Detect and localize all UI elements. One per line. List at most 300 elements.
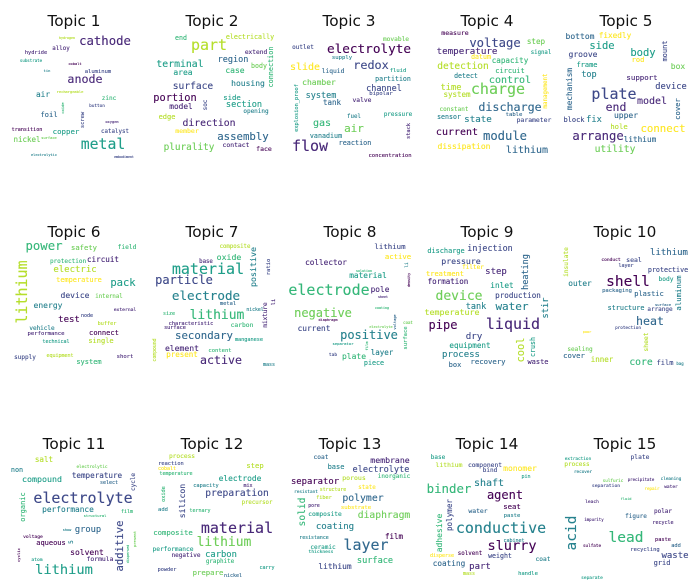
word cloud: topic 13: membrane xyxy=(370,455,410,465)
word cloud: topic 4: sensor xyxy=(437,113,461,121)
word cloud: topic 12: step xyxy=(246,461,264,470)
word cloud: topic 14: shaft xyxy=(474,478,504,489)
word cloud: topic 10: body xyxy=(659,276,674,283)
panel: topic 7 xyxy=(152,223,277,368)
word cloud: topic 4: lithium xyxy=(506,145,548,156)
word cloud: topic 9: treatment xyxy=(426,270,464,278)
word cloud: topic 13: lithium xyxy=(318,562,352,571)
word cloud: topic 14: agent xyxy=(487,488,523,502)
word cloud: topic 15: repair xyxy=(644,486,660,491)
word cloud: topic 2: region xyxy=(218,55,248,65)
word cloud: topic 13: diaphragm xyxy=(358,510,410,521)
word cloud: topic 11: show xyxy=(63,528,72,532)
word cloud: topic 2: extend xyxy=(245,49,267,56)
word cloud: topic 7: nickel xyxy=(246,307,264,313)
word cloud: topic 4: datum xyxy=(471,53,491,61)
word cloud: topic 3: bipolar xyxy=(369,91,393,97)
word cloud: topic 13: polymer xyxy=(342,493,384,504)
word cloud: topic 13: composite xyxy=(308,511,342,518)
word cloud: topic 5: end xyxy=(606,100,626,114)
word cloud: topic 14: adhesive xyxy=(435,514,444,552)
word cloud: topic 2: member xyxy=(175,127,199,135)
word cloud: topic 9: recovery xyxy=(470,357,506,366)
word cloud: topic 5: model xyxy=(637,96,667,107)
word cloud: topic 2: direction xyxy=(182,118,236,129)
word cloud: topic 7: element xyxy=(165,343,199,353)
word cloud: topic 6: short xyxy=(117,354,133,360)
word cloud: topic 4: table xyxy=(506,112,523,118)
word cloud: topic 4: step xyxy=(527,37,546,46)
word cloud: topic 4: management xyxy=(543,74,549,108)
word cloud: topic 11 xyxy=(11,455,137,578)
word cloud: topic 2: contact xyxy=(223,141,250,149)
word cloud: topic 2: end xyxy=(175,34,187,42)
word cloud: topic 6: test xyxy=(58,315,80,325)
word cloud: topic 3: concentration xyxy=(368,153,412,159)
word cloud: topic 2: edge xyxy=(159,113,175,121)
word cloud: topic 12: temperature xyxy=(159,471,193,477)
word cloud: topic 4: time xyxy=(441,83,461,93)
word cloud: topic 6: system xyxy=(76,358,102,366)
word cloud: topic 3: slide xyxy=(290,62,320,73)
word cloud: topic 14: pin xyxy=(521,474,531,480)
word cloud: topic 10: lithium xyxy=(650,248,688,258)
word cloud: topic 5: bottom xyxy=(566,32,595,41)
word cloud: topic 10: shell xyxy=(606,274,650,290)
word cloud: topic 11: electrolyte xyxy=(33,489,133,507)
word cloud: topic 3: tank xyxy=(323,98,342,107)
word cloud: topic 8: tab xyxy=(329,352,337,358)
word cloud: topic 1: metal xyxy=(81,136,125,153)
word cloud: topic 3: explosion_proof xyxy=(294,84,300,132)
panel: topic 13 xyxy=(291,435,411,571)
word cloud: topic 9: liquid xyxy=(486,315,540,333)
word cloud: topic 1: aluminum xyxy=(85,69,112,75)
word cloud: topic 1: screw xyxy=(80,111,86,128)
word cloud: topic 1: cathode xyxy=(79,34,131,48)
word cloud: topic 4: discharge xyxy=(478,100,542,114)
word cloud: topic 15: acid xyxy=(564,516,580,550)
word cloud: topic 11: structural xyxy=(84,513,106,518)
word cloud: topic 9: discharge xyxy=(427,247,465,255)
word cloud: topic 5: fix xyxy=(586,115,602,125)
word cloud: topic 5: mount xyxy=(661,40,669,62)
word cloud: topic 15: figure xyxy=(625,513,647,520)
word cloud: topic 3: air xyxy=(344,122,364,135)
word cloud: topic 4: voltage xyxy=(469,36,521,50)
word cloud: topic 9 xyxy=(425,243,551,369)
word cloud: topic 15: cleaning xyxy=(661,476,682,482)
word cloud: topic 4: charge xyxy=(471,80,525,98)
word cloud: topic 10 xyxy=(563,247,688,368)
word cloud: topic 1: substrate xyxy=(20,58,43,63)
word cloud: topic 2: portion xyxy=(153,92,197,104)
word cloud: topic 3: reaction xyxy=(339,139,371,147)
word cloud: topic 2: electrically xyxy=(226,33,274,41)
word cloud: topic 14: coat xyxy=(536,556,551,563)
word cloud: topic 9: stir xyxy=(541,298,551,318)
word cloud: topic 10: protection xyxy=(615,325,641,331)
title: topic 12: Topic 12 xyxy=(180,435,243,453)
word cloud: topic 11: film xyxy=(121,509,133,515)
word cloud: topic 14: handle xyxy=(518,571,538,577)
title: topic 10: Topic 10 xyxy=(593,223,656,241)
word cloud: topic 3: system xyxy=(306,91,336,101)
word cloud: topic 8: surface xyxy=(403,326,409,350)
word cloud: topic 12: preparation xyxy=(205,488,269,499)
word cloud: topic 3: outlet xyxy=(292,44,314,51)
word cloud: topic 15: fluid xyxy=(621,497,631,501)
word cloud: topic 1: embodiment xyxy=(114,155,134,159)
word cloud: topic 10: arrange xyxy=(647,306,673,313)
panel: topic 4 xyxy=(436,12,551,156)
word cloud: topic 10: outer xyxy=(568,279,592,288)
word cloud: topic 12: oxide xyxy=(161,486,167,502)
word cloud: topic 3: channel xyxy=(366,84,402,94)
word cloud: topic 6: external xyxy=(114,307,136,313)
word cloud: topic 1: tin xyxy=(44,69,50,73)
title: topic 2: Topic 2 xyxy=(184,12,239,30)
word cloud: topic 15: grid xyxy=(654,559,670,567)
word cloud: topic 14: mass xyxy=(463,571,475,577)
word cloud: topic 5: box xyxy=(671,62,685,71)
word cloud: topic 14: water xyxy=(468,507,488,515)
word cloud: topic 9: inlet xyxy=(490,281,514,290)
word cloud: topic 12 xyxy=(153,453,275,579)
word cloud: topic 13: solid xyxy=(297,498,308,526)
word cloud: topic 15 xyxy=(564,454,689,581)
word cloud: topic 10: plastic xyxy=(634,290,664,298)
word cloud: topic 10: aluminum xyxy=(674,275,683,311)
panel: topic 8 xyxy=(288,223,413,367)
word cloud: topic 11: organic xyxy=(19,492,27,522)
word cloud: topic 3: pressure xyxy=(384,112,413,118)
word cloud: topic 5: rod xyxy=(632,56,644,64)
word cloud: topic 6: power xyxy=(25,239,63,253)
word cloud: topic 1: nickel xyxy=(13,135,41,144)
panel: topic 12 xyxy=(153,435,275,579)
word cloud: topic 15: recover xyxy=(574,470,592,475)
word cloud: topic 6: lithium xyxy=(13,260,31,324)
word cloud: topic 12: process xyxy=(169,453,195,460)
word cloud: topic 14: component xyxy=(468,462,502,469)
word cloud: topic 3: stack xyxy=(406,122,412,139)
word cloud: topic 10: insulate xyxy=(563,247,570,277)
word cloud: topic 5: device xyxy=(655,82,687,92)
panel: topic 5 xyxy=(563,12,687,155)
word cloud: topic 7: content xyxy=(208,348,232,354)
word cloud: topic 1: copper xyxy=(53,127,80,136)
word cloud: topic 8: plate xyxy=(342,352,366,361)
word cloud: topic 8: diaphragm xyxy=(319,318,337,322)
word cloud: topic 12: prepare xyxy=(193,568,223,577)
word cloud: topic 1: alloy xyxy=(52,46,70,52)
word cloud: topic 7: material xyxy=(172,260,244,278)
word cloud: topic 1 xyxy=(12,34,134,159)
word cloud: topic 7: positive xyxy=(248,247,258,287)
word cloud: topic 8: piece xyxy=(364,359,384,367)
word cloud: topic 4: constant xyxy=(440,106,469,113)
word cloud: topic 4: system xyxy=(443,90,471,99)
word cloud: topic 15: precipitate xyxy=(628,477,655,482)
word cloud: topic 9: filter xyxy=(462,264,484,271)
title: topic 8: Topic 8 xyxy=(322,223,377,241)
word cloud: topic 5: block xyxy=(563,116,585,124)
word cloud: topic 14 xyxy=(427,454,551,577)
word cloud: topic 12: performance xyxy=(153,546,194,553)
word cloud: topic 11: aqueous xyxy=(36,539,66,547)
word cloud: topic 10: bag xyxy=(676,361,684,366)
word cloud: topic 9: injection xyxy=(467,243,513,253)
word cloud: topic 5: groove xyxy=(569,50,598,59)
word cloud: topic 11: compound xyxy=(22,474,62,484)
word cloud: topic 8: solution xyxy=(356,269,372,273)
word cloud: topic 14: monomer xyxy=(503,464,537,473)
word cloud: topic 15: separation xyxy=(592,483,620,489)
word cloud: topic 7: characteristic xyxy=(169,321,213,327)
word cloud: topic 8: pole xyxy=(371,285,390,294)
word cloud: topic 2: body xyxy=(251,62,267,70)
word cloud: topic 14: conductive xyxy=(456,519,546,537)
word cloud: topic 6: pack xyxy=(110,277,136,289)
word cloud: topic 3 xyxy=(290,36,413,159)
word cloud: topic 9: waste xyxy=(527,358,549,366)
word cloud: topic 1: oxygen xyxy=(105,120,119,124)
word cloud: topic 1: foil xyxy=(40,110,58,119)
word cloud: topic 14: weight xyxy=(488,552,512,560)
word cloud: topic 2: case xyxy=(225,66,245,75)
word cloud: topic 9: production xyxy=(495,291,541,300)
word cloud: topic 4: circuit xyxy=(495,67,525,75)
word cloud: topic 10: surface xyxy=(655,302,672,307)
word cloud: topic 13: porous xyxy=(342,474,366,482)
word cloud: topic 8: current xyxy=(298,324,330,333)
word cloud: topic 15: sulfate xyxy=(583,543,601,549)
word cloud: topic 5 xyxy=(563,31,687,155)
word cloud: topic 10: inner xyxy=(591,355,614,364)
word cloud: topic 6: performance xyxy=(27,331,65,337)
word cloud: topic 13: pore xyxy=(308,504,320,509)
panel: topic 14 xyxy=(427,435,551,577)
word cloud: topic 12: silicon xyxy=(177,484,187,518)
word cloud: topic 11: cycle xyxy=(130,473,137,491)
word cloud: topic 9: dry xyxy=(466,331,483,342)
word cloud: topic 3: supply xyxy=(332,55,353,61)
panel: topic 15 xyxy=(564,435,689,581)
word cloud: topic 12: graphite xyxy=(206,559,235,565)
word cloud: topic 2: area xyxy=(173,68,193,77)
word cloud: topic 13 xyxy=(291,454,411,571)
word cloud: topic 14: base xyxy=(431,454,446,461)
word cloud: topic 2: section xyxy=(226,100,262,110)
word cloud: topic 6: device xyxy=(61,291,90,300)
word cloud: topic 6 xyxy=(13,239,137,366)
word cloud: topic 2: assembly xyxy=(217,130,269,143)
word cloud: topic 6: electric xyxy=(53,265,97,275)
word cloud: topic 15: recycling xyxy=(630,547,660,553)
word cloud: topic 7: ratio xyxy=(266,259,272,275)
word cloud: topic 10: sealing xyxy=(567,346,593,353)
title: topic 13: Topic 13 xyxy=(318,435,381,453)
word cloud: topic 15: plate xyxy=(631,454,650,461)
word cloud: topic 2: housing xyxy=(231,79,265,88)
word cloud: topic 8: active xyxy=(385,252,411,261)
word cloud: topic 6: internal xyxy=(95,294,123,300)
word cloud: topic 12: reaction xyxy=(158,461,184,467)
word cloud: topic 3: flow xyxy=(292,137,329,155)
word cloud: topic 15: sulfuric xyxy=(603,478,624,484)
word cloud: topic 14: solvent xyxy=(458,551,482,557)
word cloud: topic 15: lead xyxy=(609,530,643,546)
word cloud: topic 10: packaging xyxy=(602,288,632,294)
word cloud: topic 14: coating xyxy=(433,559,465,568)
word cloud: topic 1: electrolytic xyxy=(31,153,57,157)
word cloud: topic 5: fixedly xyxy=(599,31,632,40)
word cloud: topic 5: support xyxy=(626,73,658,82)
word cloud: topic 9: temperature xyxy=(425,307,479,317)
word cloud: topic 12: mix xyxy=(243,483,253,489)
word cloud: topic 4: temperature xyxy=(437,46,497,57)
word cloud: topic 11: 5 xyxy=(68,540,75,544)
title: topic 5: Topic 5 xyxy=(598,12,653,30)
word cloud: topic 6: temperature xyxy=(56,276,102,284)
word cloud: topic 8: collector xyxy=(305,258,347,267)
word cloud: topic 12: electrode xyxy=(219,474,262,483)
word cloud: topic 1: hydrogen xyxy=(59,36,75,40)
word cloud: topic 13: resistant xyxy=(294,489,318,495)
word cloud: topic 2: side xyxy=(223,93,241,102)
word cloud: topic 9: equipment xyxy=(449,341,491,350)
word cloud: topic 2: soc xyxy=(202,99,209,110)
word cloud: topic 1: surface xyxy=(41,136,57,140)
word cloud: topic 7: particle xyxy=(155,273,213,287)
word cloud: topic 7: size xyxy=(163,311,175,317)
word cloud: topic 9: tank xyxy=(466,302,486,312)
word cloud: topic 11: formula xyxy=(87,555,114,563)
word cloud: topic 6: equipment xyxy=(46,353,74,359)
word cloud: topic 11: cyclic xyxy=(16,547,21,562)
word cloud: topic 10: structure xyxy=(608,304,644,312)
word cloud: topic 7: manganese xyxy=(235,337,263,343)
word cloud: topic 8 xyxy=(288,242,413,367)
word cloud: topic 14: paste xyxy=(504,513,520,519)
word cloud: topic 7: surface xyxy=(164,325,186,331)
word cloud: topic 3: gas xyxy=(313,118,331,129)
word cloud: topic 10: core xyxy=(629,357,653,368)
word cloud: topic 13: coating xyxy=(316,522,354,532)
word cloud: topic 6: supply xyxy=(14,354,36,361)
word cloud: topic 14: binder xyxy=(427,481,471,496)
word cloud: topic 10: seal xyxy=(626,256,642,264)
word cloud: topic 3: chamber xyxy=(302,78,336,87)
panel: topic 11 xyxy=(11,435,137,578)
word cloud: topic 8: coat xyxy=(403,320,413,325)
word cloud: topic 8: lithium xyxy=(374,242,406,251)
title: topic 6: Topic 6 xyxy=(46,223,101,241)
word cloud: topic 7: composite xyxy=(220,244,251,250)
word cloud: topic 7: lithium xyxy=(190,308,245,323)
word cloud: topic 5: connect xyxy=(640,122,686,135)
word cloud: topic 11: electrolytic xyxy=(76,464,108,470)
word cloud: topic 6: technical xyxy=(42,339,70,345)
word cloud: topic 12: material xyxy=(201,519,273,537)
title: topic 9: Topic 9 xyxy=(459,223,514,241)
word cloud: topic 14: part xyxy=(469,562,491,572)
word cloud: topic 13: coat xyxy=(314,454,329,461)
word cloud: topic 7: oxide xyxy=(217,252,241,262)
word cloud: topic 4: capacity xyxy=(492,56,529,65)
word cloud: topic 7: metal xyxy=(220,301,236,307)
word cloud: topic 10: film xyxy=(657,359,673,367)
word cloud: topic 6: vehicle xyxy=(29,325,55,332)
word cloud: topic 12: carry xyxy=(259,565,275,571)
word cloud: topic 10: sheet xyxy=(642,332,650,352)
word cloud: topic 11: group xyxy=(75,525,101,535)
word cloud: topic 5: top xyxy=(581,70,597,80)
word cloud: topic 12: composite xyxy=(153,528,193,537)
title: topic 3: Topic 3 xyxy=(321,12,376,30)
word cloud: topic 8: electrolyte xyxy=(369,325,393,329)
word cloud: topic 9: formation xyxy=(428,277,468,286)
word cloud: topic 12: nickel xyxy=(224,573,242,579)
panel: topic 6 xyxy=(13,223,137,366)
word cloud: topic 5: lithium xyxy=(624,135,657,144)
word cloud: topic 12: negative xyxy=(172,552,201,559)
word cloud: topic 11: temperature xyxy=(72,471,123,480)
word cloud: topic 1: air xyxy=(36,90,50,99)
word cloud: topic 13: surface xyxy=(357,556,393,566)
word cloud: topic 7: electrode xyxy=(172,288,240,303)
word cloud: topic 11: present xyxy=(132,531,137,547)
word cloud: topic 8: separator xyxy=(332,341,354,346)
word cloud: topic 8: film xyxy=(365,341,369,350)
word cloud: topic 3: vanadium xyxy=(310,132,342,140)
panel: topic 2 xyxy=(153,12,275,153)
word cloud: topic 8: positive xyxy=(340,328,398,342)
word cloud: topic 4: state xyxy=(464,114,492,125)
word cloud: topic 4: parameter xyxy=(517,116,551,124)
word cloud: topic 13: layer xyxy=(343,536,389,554)
word cloud: topic 4: module xyxy=(483,129,527,143)
word cloud: topic 15: add xyxy=(671,543,681,549)
word cloud: topic 10: heat xyxy=(636,314,664,328)
word cloud: topic 1: anode xyxy=(67,72,103,86)
word cloud: topic 7: mixture xyxy=(262,302,269,328)
word cloud: topic 11: lithium xyxy=(35,562,93,578)
word cloud: topic 2: surface xyxy=(173,81,213,92)
word cloud: topic 11: solvent xyxy=(70,548,104,557)
word cloud: topic 1: transition xyxy=(12,127,42,133)
word cloud: topic 10: layer xyxy=(618,263,634,269)
word cloud: topic 4: measure xyxy=(441,29,469,37)
word cloud: topic 10: poor xyxy=(583,330,591,334)
word cloud: topic 5: upper xyxy=(614,111,638,120)
word cloud: topic 8: coating xyxy=(375,306,389,310)
word cloud: topic 4: detect xyxy=(454,72,478,80)
word cloud: topic 7: secondary xyxy=(175,329,234,342)
word cloud: topic 5: cover xyxy=(673,98,682,120)
word cloud: topic 15: polar xyxy=(654,508,672,515)
word cloud: topic 11: voltage xyxy=(23,534,43,540)
word cloud: topic 13: resistance xyxy=(299,535,329,541)
word cloud: topic 9: pressure xyxy=(441,256,481,266)
word cloud: topic 13: inorganic xyxy=(378,473,411,480)
panel: topic 3 xyxy=(290,12,413,159)
word cloud: topic 1: button xyxy=(89,103,105,109)
word cloud: topic 3: liquid xyxy=(322,68,345,75)
word cloud: topic 5: plate xyxy=(591,85,637,103)
word cloud: topic 3: redox xyxy=(353,58,389,72)
